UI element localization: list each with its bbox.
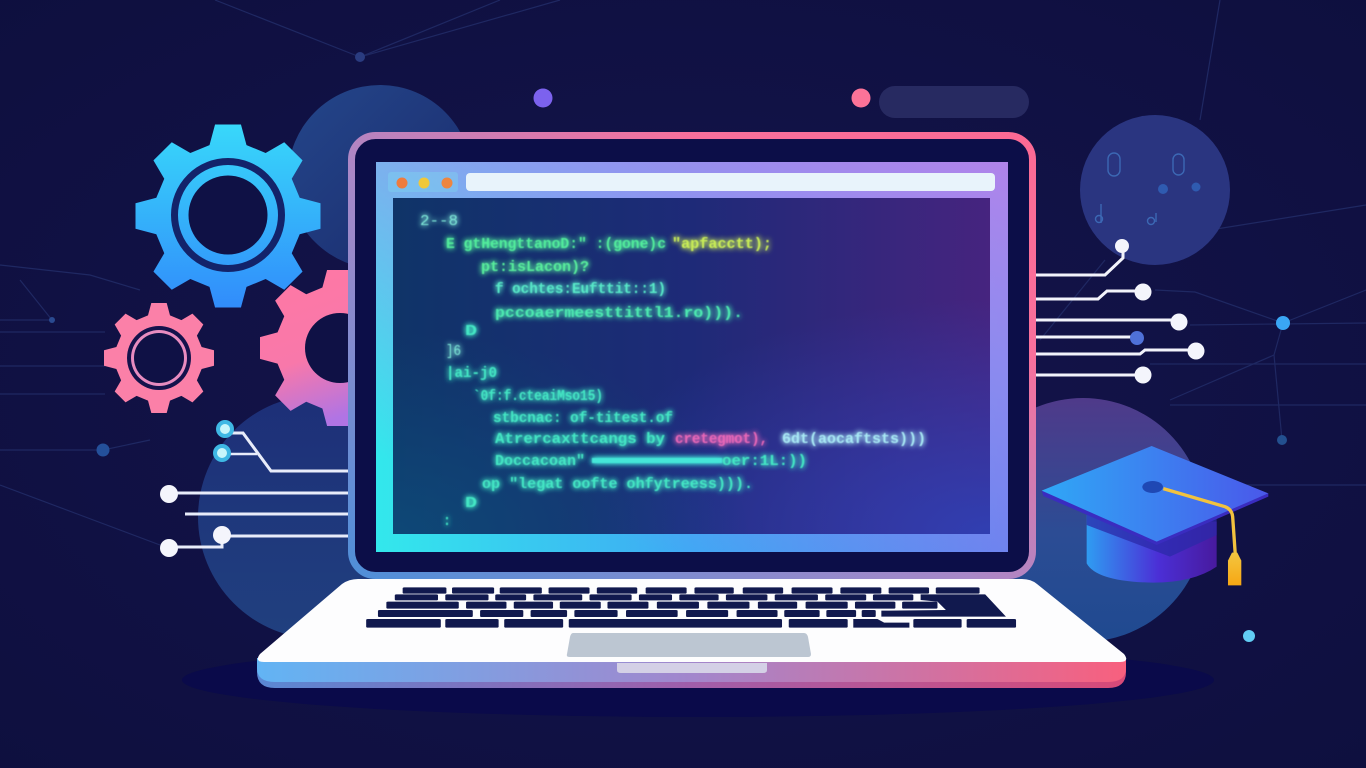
circuit lines: right bbox=[1034, 239, 1204, 384]
keyboard bbox=[366, 587, 1016, 628]
network nodes bbox=[49, 52, 1290, 642]
code panel bbox=[393, 198, 990, 534]
code text: Atrercaxttcangs by bbox=[495, 431, 665, 448]
circuit lines: left bbox=[160, 422, 350, 557]
code text: ]6 bbox=[446, 343, 461, 360]
ground shadow bbox=[182, 643, 1214, 717]
laptop base deck bbox=[258, 579, 1126, 662]
laptop hinge notch bbox=[617, 663, 767, 673]
browser toolbar bbox=[388, 172, 995, 192]
code text: E gtHengttanoD:" :(gone)c bbox=[446, 236, 666, 253]
code text: Doccacoan" bbox=[495, 453, 585, 470]
icon: large blue gear bbox=[136, 124, 320, 308]
code text: f ochtes:Eufttit::1) bbox=[495, 281, 666, 298]
background circle: top right with binary marks bbox=[1080, 115, 1230, 265]
code text: 2--8 bbox=[420, 213, 458, 230]
laptop bbox=[257, 136, 1126, 688]
background circle: lower right bbox=[961, 398, 1205, 642]
code text: cretegmot), bbox=[675, 431, 768, 448]
laptop lid bezel bbox=[352, 136, 1032, 576]
code text: stbcnac: of-titest.of bbox=[493, 410, 673, 427]
icon: pink gear behind laptop bbox=[260, 270, 416, 426]
code text: pccoaermeesttittl1.ro))). bbox=[495, 305, 743, 322]
code text bbox=[420, 213, 926, 530]
code text: D bbox=[465, 323, 477, 340]
icon: graduation cap bbox=[1042, 446, 1268, 585]
network lines background bbox=[0, 0, 1366, 545]
laptop base front band bbox=[257, 658, 1126, 688]
code text: D bbox=[465, 495, 477, 512]
decorative dots and pill at the top bbox=[534, 86, 1029, 118]
code text: : bbox=[443, 513, 451, 530]
trackpad bbox=[567, 633, 811, 657]
code text: "apfacctt); bbox=[672, 236, 772, 253]
code text: op "legat oofte ohfytreess))). bbox=[482, 476, 753, 493]
code text: `0f:f.cteaiMso15) bbox=[473, 388, 603, 405]
code text: |ai-j0 bbox=[446, 365, 497, 382]
code text: 6dt(aocaftsts))) bbox=[782, 431, 926, 448]
screen frame bbox=[376, 162, 1008, 552]
background circle: lower left bbox=[198, 395, 442, 639]
background circle: top left bbox=[288, 85, 472, 269]
code text: oer:1L:)) bbox=[722, 453, 807, 470]
icon: small pink gear bbox=[104, 303, 214, 413]
code text: pt:isLacon)? bbox=[481, 259, 589, 276]
